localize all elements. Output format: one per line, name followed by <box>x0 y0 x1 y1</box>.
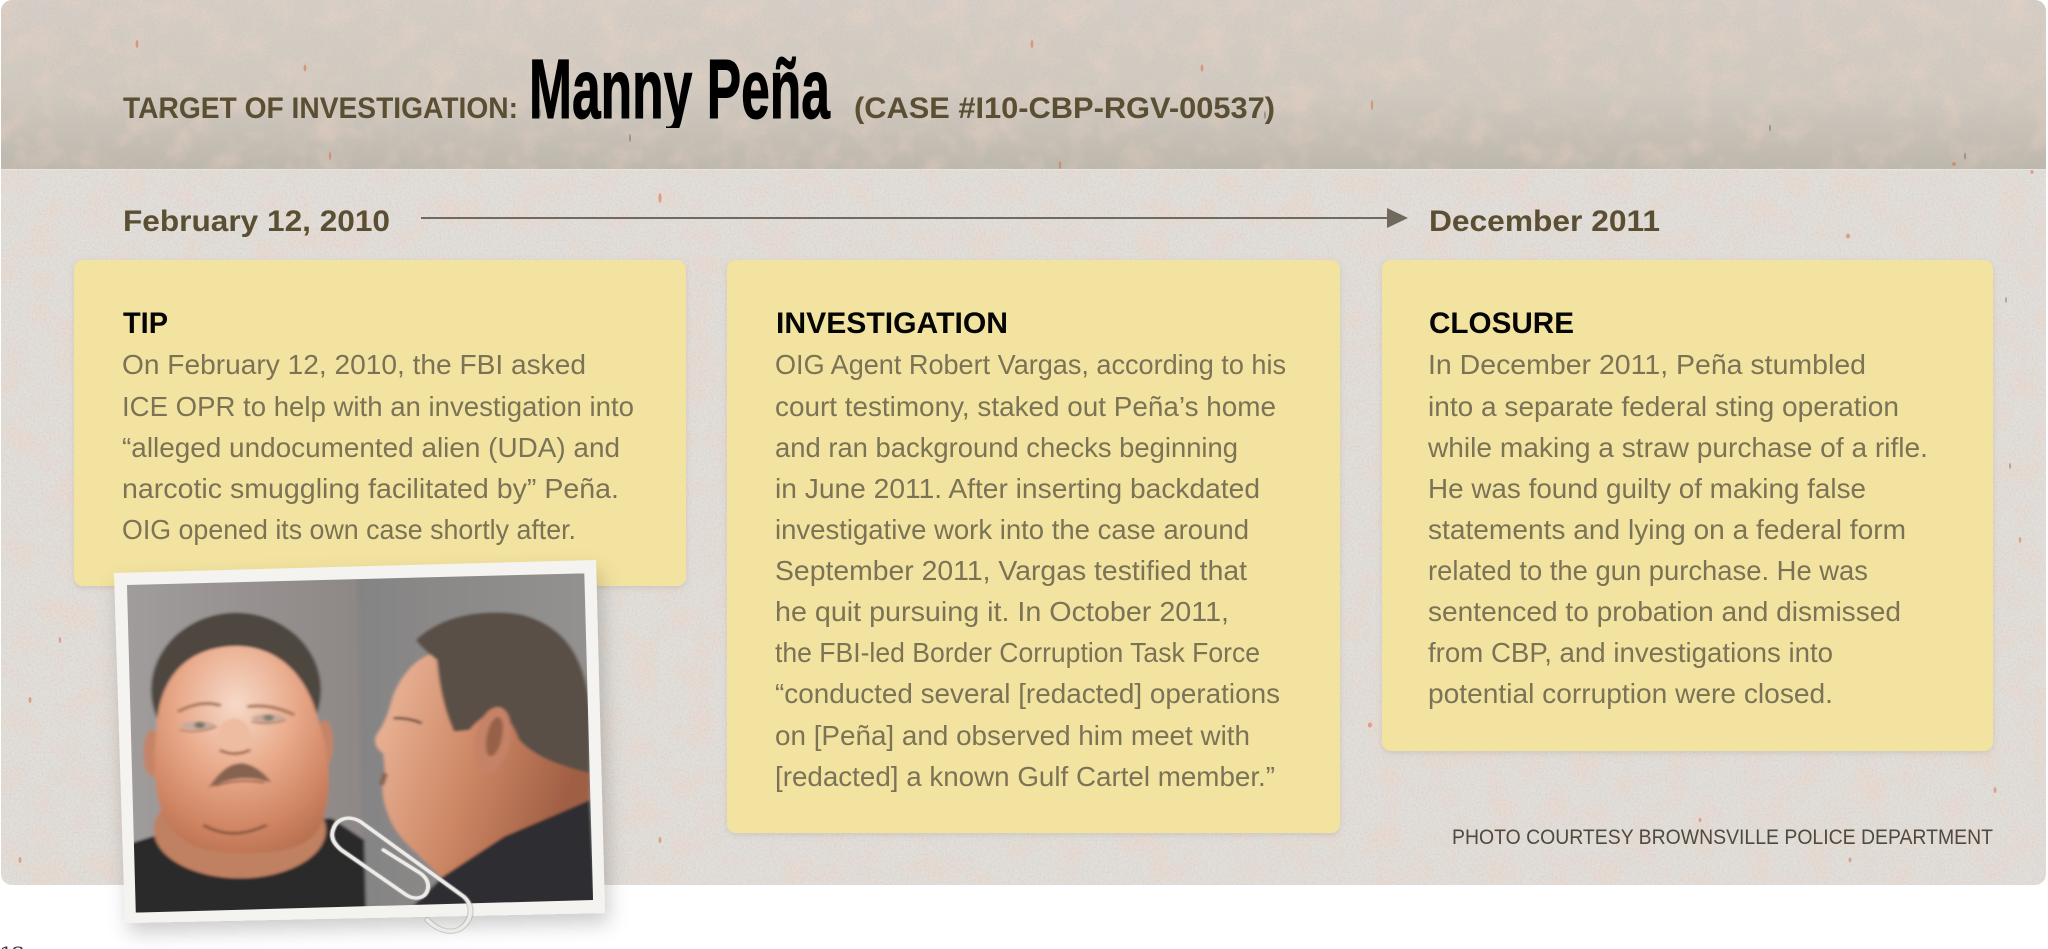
panel: investigation <box>727 260 1340 833</box>
case number: (CASE #I10-CBP-RGV-00537) <box>854 92 1275 125</box>
text: investigation body: OIG Agent Robert Vargas, according to his <box>775 349 1286 380</box>
photo frame <box>114 560 605 923</box>
text: closure body: potential corruption were closed. <box>1428 678 1833 709</box>
mugshot image <box>117 570 596 917</box>
text: closure body: He was found guilty of making false <box>1428 473 1866 504</box>
text: investigation body: September 2011, Vargas testified that <box>775 555 1247 586</box>
heading: investigation: INVESTIGATION <box>776 307 1008 340</box>
text: investigation body: investigative work into the case around <box>775 514 1249 545</box>
heading label: target of investigation: TARGET OF INVESTIGATION: <box>123 92 518 125</box>
text: closure body <box>1427 349 1928 709</box>
text: investigation body: and ran background checks beginning <box>775 432 1238 463</box>
title line <box>123 56 1274 128</box>
panel: tip <box>74 260 686 586</box>
text: closure body: statements and lying on a federal form <box>1428 514 1906 545</box>
text: investigation body: the FBI-led Border Corruption Task Force <box>775 637 1260 668</box>
icon: paperclip <box>332 818 471 931</box>
end date: December 2011 <box>1429 205 1660 238</box>
timeline <box>123 205 1660 238</box>
heading: closure: CLOSURE <box>1429 307 1574 340</box>
text: tip body: ICE OPR to help with an investigation into <box>122 391 634 422</box>
text: investigation body <box>775 349 1286 792</box>
text: tip body <box>122 349 634 545</box>
text: closure body: related to the gun purchase. He was <box>1428 555 1868 586</box>
text: tip body: OIG opened its own case shortly after. <box>122 514 576 545</box>
text: closure body: sentenced to probation and dismissed <box>1428 596 1901 627</box>
photo credit: PHOTO COURTESY BROWNSVILLE POLICE DEPARTMENT <box>1452 826 1993 849</box>
heading: name: Manny Peña <box>529 42 831 136</box>
panel: closure <box>1382 260 1993 751</box>
text: closure body: In December 2011, Peña stumbled <box>1428 349 1866 380</box>
text: closure body: from CBP, and investigations into <box>1428 637 1833 668</box>
text: investigation body: in June 2011. After inserting backdated <box>775 473 1260 504</box>
arrow <box>421 208 1408 228</box>
text: tip body: narcotic smuggling facilitated by” Peña. <box>122 473 619 504</box>
text: investigation body: on [Peña] and observed him meet with <box>775 720 1250 751</box>
heading: tip: TIP <box>123 307 168 340</box>
start date: February 12, 2010 <box>123 205 390 238</box>
text: investigation body: court testimony, staked out Peña’s home <box>775 391 1276 422</box>
text: closure body: into a separate federal sting operation <box>1428 391 1899 422</box>
text: tip body: “alleged undocumented alien (UDA) and <box>122 432 620 463</box>
text: investigation body: “conducted several [redacted] operations <box>775 678 1280 709</box>
text: investigation body: [redacted] a known Gulf Cartel member.” <box>775 761 1275 792</box>
text: tip body: On February 12, 2010, the FBI asked <box>122 349 586 380</box>
text: closure body: while making a straw purchase of a rifle. <box>1427 432 1928 463</box>
text: investigation body: he quit pursuing it. In October 2011, <box>775 596 1229 627</box>
photo: mugshot with frame <box>114 560 605 931</box>
